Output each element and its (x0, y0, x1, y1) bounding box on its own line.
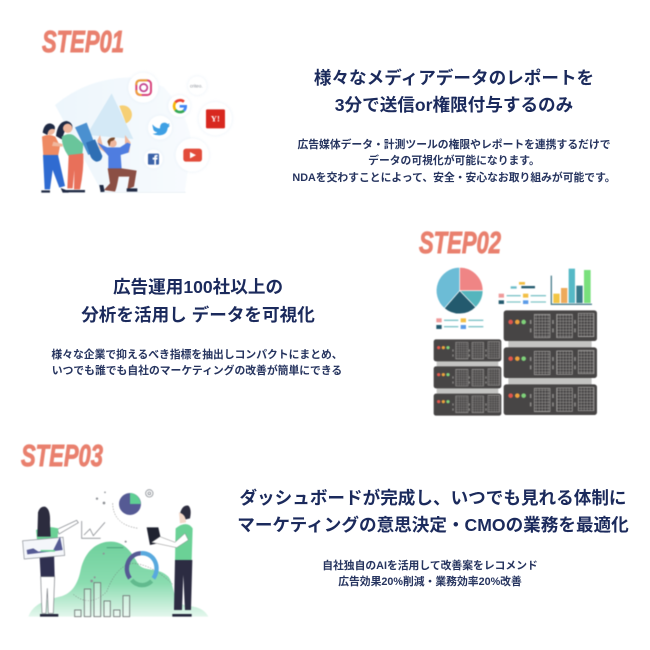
icon: criteo: criteo. (190, 84, 203, 89)
icon: instagram (136, 80, 151, 95)
server rack: right (504, 310, 597, 415)
figure: kneeling man (97, 135, 137, 192)
pie legend (436, 318, 483, 329)
icon: youtube (183, 149, 202, 162)
icon: yahoo: Y! (211, 114, 220, 124)
illustration: team with megaphone and media icons (40, 78, 226, 194)
title: step 1 (314, 68, 594, 115)
server rack: left (434, 339, 501, 416)
icon: sun (119, 105, 132, 123)
figure: man with laptop (147, 505, 193, 617)
icon: megaphone (75, 93, 133, 162)
illustration: analysts with dashboard (22, 488, 208, 618)
pie chart (436, 267, 483, 314)
title: step 1: 様々なメディアデータのレポートを (314, 68, 594, 88)
title: step 2: 分析を活用し データを可視化 (81, 304, 315, 324)
text: step 2 description: 様々な企業で抑えるべき指標を抽出しコンパクトにまとめ、 (51, 349, 343, 361)
icon: facebook (148, 154, 159, 165)
bar chart legend (499, 282, 546, 304)
title: step 2 (81, 277, 315, 324)
donut chart (127, 553, 157, 585)
figure: woman pointing (23, 507, 78, 617)
text: step 1 description (292, 138, 616, 184)
heading: STEP02: STEP02 (419, 225, 501, 260)
line chart (82, 521, 105, 538)
title: step 3: マーケティングの意思決定・CMOの業務を最適化 (237, 515, 629, 535)
bar chart (551, 269, 592, 304)
panel: step 1 (40, 24, 616, 194)
decorative dots (90, 491, 127, 582)
figure: woman in green (56, 121, 85, 192)
ground line (100, 191, 186, 193)
text: step 2 description: いつでも誰でも自社のマーケティングの改善が簡単にできる (52, 365, 342, 377)
text: step 1 description: データの可視化が可能になります。 (368, 155, 540, 167)
text: step 2 description (51, 348, 343, 377)
text: step 3 description: 自社独自のAIを活用して改善案をレコメンド (322, 560, 538, 572)
icon: google (174, 100, 186, 112)
panel: step 2 (51, 225, 598, 416)
title: step 3 (237, 488, 629, 535)
green hill background (28, 542, 208, 617)
pie chart (119, 493, 141, 515)
figure: woman in orange (41, 123, 69, 193)
heading: STEP03: STEP03 (21, 438, 103, 473)
text: step 3 description (322, 560, 538, 588)
title: step 2: 広告運用100社以上の (113, 277, 283, 297)
icon: broadcast fan (55, 77, 192, 192)
icon: yahoo (206, 109, 225, 128)
text: step 1 description: 広告媒体データ・計測ツールの権限やレポートを連携するだけで (297, 139, 611, 151)
icon: target (146, 490, 153, 497)
dashed connector lines (73, 503, 173, 601)
heading: STEP01: STEP01 (42, 24, 124, 59)
title: step 3: ダッシュボードが完成し、いつでも見れる体制に (239, 488, 627, 508)
panel: step 3 (20, 438, 629, 618)
text: step 3 description: 広告効果20%削減・業務効率20%改善 (338, 576, 522, 588)
text: step 1 description: NDAを交わすことによって、安全・安心なお取り組みが可能です。 (292, 172, 616, 184)
bar chart (75, 583, 130, 617)
title: step 1: 3分で送信or権限付与するのみ (335, 95, 573, 115)
icon: twitter (152, 123, 170, 135)
illustration: charts and servers (432, 267, 598, 416)
